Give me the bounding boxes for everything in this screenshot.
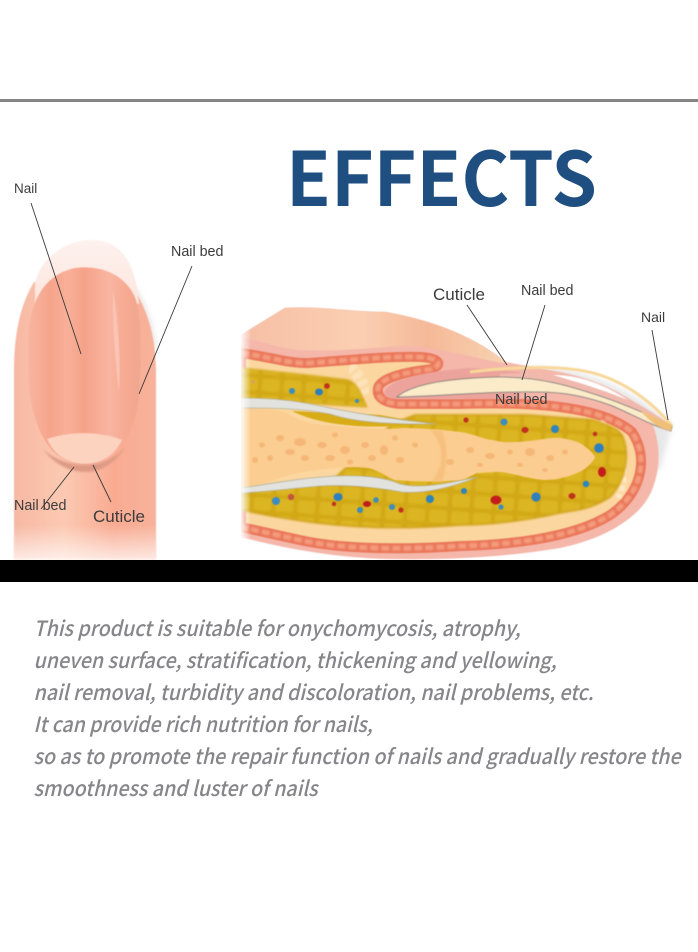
- left edge fade: [241, 300, 251, 550]
- top stripe: [470, 367, 672, 426]
- nail free edge: [35, 240, 139, 304]
- nail root pink fold: [384, 368, 520, 399]
- label: Cuticle: Cuticle: [93, 507, 145, 526]
- body text: nail removal, turbidity and discoloration, nail problems, etc.: [34, 677, 594, 707]
- left edge mask: [228, 300, 241, 555]
- yellow sliver: [292, 411, 430, 427]
- label: Nail bed (right): Nail bed: [171, 244, 224, 260]
- title: EFFECTS: [286, 119, 597, 228]
- cuticle shadow: [42, 446, 126, 472]
- label: Nail bed (top): Nail bed: [521, 283, 574, 299]
- finger shadow: [130, 285, 156, 350]
- outer skin: [241, 308, 659, 559]
- body text: uneven surface, stratification, thickening and yellowing,: [34, 645, 556, 675]
- leader lines: [31, 203, 192, 509]
- bone joint shadow: [430, 430, 446, 481]
- soft shadow: [520, 367, 672, 470]
- white gap: [553, 375, 628, 400]
- bone pores: [252, 432, 568, 472]
- blood vessels: [252, 380, 606, 513]
- panel: nail cross-section diagram: [228, 283, 672, 559]
- bone: [241, 406, 595, 490]
- pale cells near fold: [350, 366, 368, 396]
- label: Nail: Nail: [14, 181, 37, 196]
- body text: [34, 613, 682, 803]
- upper skin fold: [241, 308, 508, 364]
- pale cells in subcutaneous layer: [600, 422, 625, 498]
- leader lines: [467, 305, 668, 420]
- upper tendon: [241, 398, 436, 424]
- tip: [640, 410, 672, 431]
- top divider line: [0, 99, 698, 102]
- body text: smoothness and luster of nails: [34, 773, 319, 803]
- cream plate: [397, 377, 672, 431]
- dermis and subcutaneous layer: [241, 353, 641, 548]
- label: Nail bed (bottom): Nail bed: [14, 498, 67, 514]
- body text: It can provide rich nutrition for nails,: [34, 709, 372, 739]
- label: Cuticle: Cuticle: [433, 285, 485, 304]
- nail plate: [28, 267, 141, 465]
- nail highlight: [113, 290, 120, 393]
- nail bed pink: [500, 373, 668, 423]
- lunula: [47, 433, 122, 464]
- yellow tissue main: [241, 415, 626, 528]
- dermis cells: [241, 353, 641, 548]
- label: Nail bed (inner): Nail bed: [495, 392, 548, 408]
- yellow tissue upper: [241, 368, 367, 407]
- panel: fingertip front view: [14, 181, 224, 559]
- lower tendon: [241, 476, 478, 493]
- body text: This product is suitable for onychomycosis, atrophy,: [34, 613, 520, 643]
- black band: [0, 560, 698, 582]
- label: Nail: Nail: [641, 309, 665, 325]
- nail plate: [397, 367, 672, 431]
- finger: [14, 282, 156, 559]
